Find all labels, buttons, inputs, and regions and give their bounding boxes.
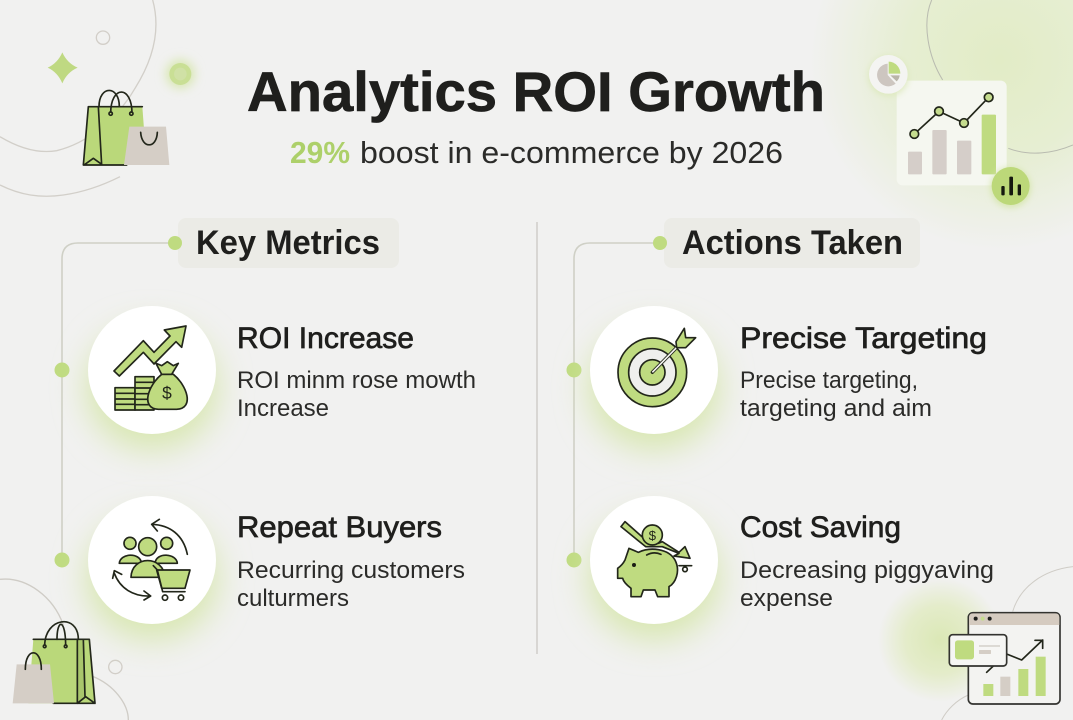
text: ROI increase: Increase	[237, 395, 329, 422]
subtitle: boost in e-commerce by 2026	[360, 135, 783, 170]
text: repeat buyers: Recurring customers	[237, 557, 465, 584]
heading: actions taken: Actions Taken	[682, 224, 903, 262]
text: precise targeting: Precise Targeting	[740, 322, 987, 355]
text: repeat buyers: Repeat Buyers	[237, 511, 442, 544]
heading: key metrics	[178, 218, 399, 268]
panel: key metrics	[54, 218, 476, 640]
text: precise targeting: targeting and aim	[740, 395, 932, 422]
icon: cost saving	[588, 496, 720, 640]
text: ROI increase: ROI Increase	[237, 322, 414, 355]
decoration: bottom-right browser chart	[942, 567, 1073, 720]
center divider	[536, 222, 538, 654]
text: cost saving: Cost Saving	[740, 511, 901, 544]
panel: actions taken	[566, 218, 994, 640]
connector: key metrics timeline	[54, 236, 182, 568]
text: precise targeting: Precise targeting,	[740, 367, 918, 394]
icon: ROI increase	[86, 306, 218, 450]
text: precise targeting	[740, 322, 987, 422]
subtitle highlight: 29%: 29%	[290, 135, 350, 170]
text: ROI increase: ROI minm rose mowth	[237, 367, 476, 394]
text: ROI increase	[237, 322, 476, 422]
text: cost saving: expense	[740, 585, 833, 612]
decoration: top-right analytics card	[868, 0, 1073, 207]
connector: actions timeline	[566, 236, 667, 568]
icon: precise targeting	[588, 306, 720, 450]
icon: cost saving: $	[649, 528, 657, 543]
decoration: bottom-left shopping bags	[0, 579, 128, 720]
text: repeat buyers: culturmers	[237, 585, 349, 612]
text: cost saving: Decreasing piggyaving	[740, 557, 994, 584]
text: repeat buyers	[237, 511, 465, 612]
decoration: top-left shopping bags	[0, 0, 194, 196]
heading: key metrics: Key Metrics	[196, 224, 380, 262]
icon: repeat buyers	[86, 496, 218, 640]
heading: actions taken	[664, 218, 920, 268]
title: Analytics ROI Growth	[247, 60, 825, 123]
icon: ROI increase: $	[162, 383, 172, 403]
text: cost saving	[740, 511, 994, 612]
